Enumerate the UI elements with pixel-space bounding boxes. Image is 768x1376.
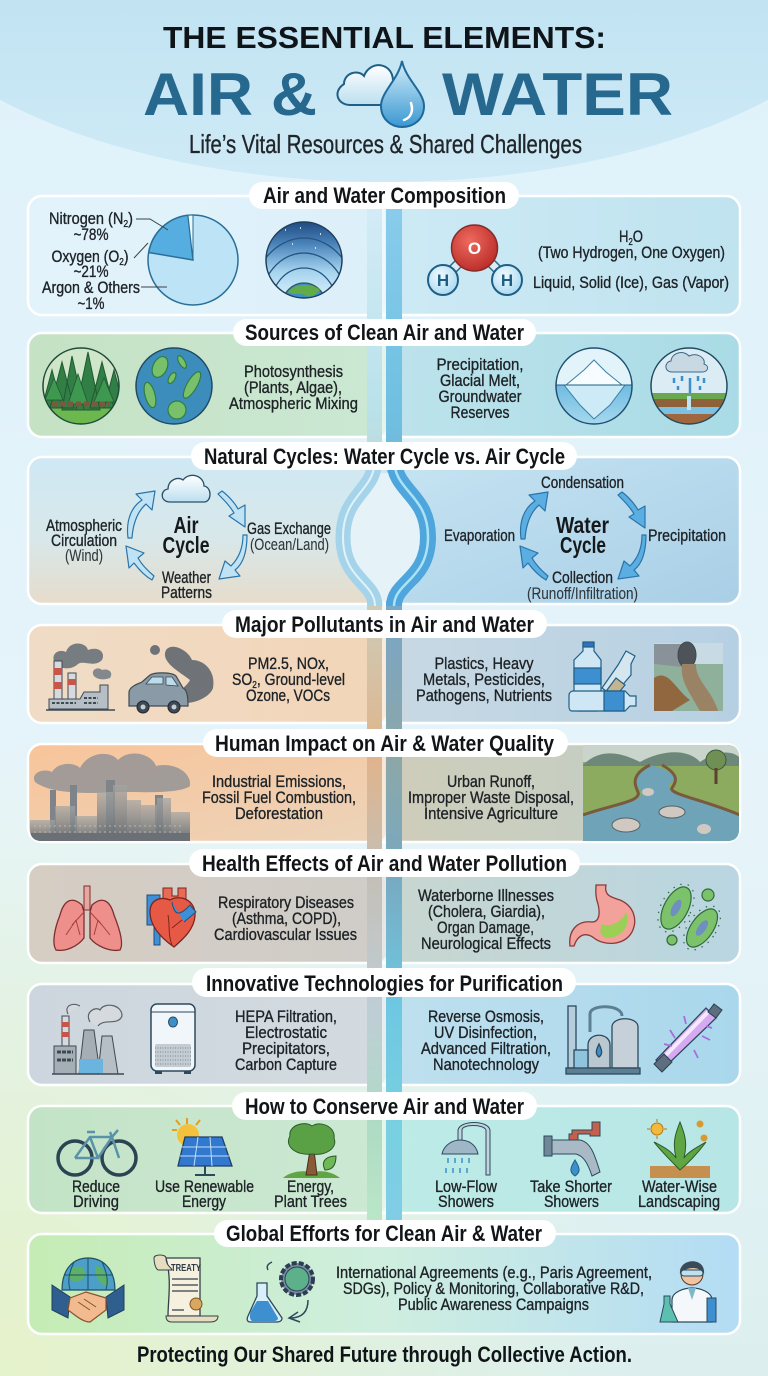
composition labels: )	[128, 209, 133, 228]
conserve air labels: Driving	[73, 1192, 119, 1211]
title word: water: WATER	[442, 61, 673, 128]
health effects of water text	[418, 886, 554, 953]
health effects of air text: (Asthma, COPD),	[232, 909, 341, 928]
heading: technologies: Innovative Technologies for Purification	[206, 971, 563, 996]
sources of clean water text: Glacial Melt,	[440, 371, 520, 390]
heading: conserve: How to Conserve Air and Water	[245, 1094, 524, 1119]
icon: flask and gear	[247, 1262, 313, 1322]
diagram: water cycle: Cycle	[560, 532, 606, 558]
conserve air labels: Energy,	[287, 1177, 334, 1196]
human impact on air text: Fossil Fuel Combustion,	[202, 788, 356, 807]
panel: human impact	[28, 744, 740, 842]
air pollutants text: SO	[232, 670, 257, 689]
heading: composition: Air and Water Composition	[263, 183, 506, 208]
water purification technologies text	[421, 1007, 551, 1074]
air purification technologies text: Precipitators,	[242, 1039, 330, 1058]
air pollutants text: , Ground-level	[257, 670, 345, 689]
icon: scientist	[660, 1261, 716, 1322]
sources of clean water text: Precipitation,	[436, 355, 524, 374]
icon: cloud and water drop	[337, 61, 424, 127]
composition labels: 2	[119, 257, 124, 268]
icon: iceberg	[556, 348, 632, 425]
panel: cycles	[28, 457, 740, 604]
icon: heart	[147, 888, 196, 947]
human impact on water text: Improper Waste Disposal,	[408, 788, 574, 807]
human impact on air text: Deforestation	[235, 804, 323, 823]
icon: water treatment plant	[566, 1006, 640, 1074]
icon: bicycle	[58, 1130, 136, 1175]
icon: air purifier	[151, 1004, 195, 1074]
title line 1: THE ESSENTIAL ELEMENTS:	[163, 20, 606, 55]
conserve air labels: Plant Trees	[274, 1192, 347, 1211]
diagram: air cycle: Circulation	[51, 531, 117, 550]
icon: globe and handshake	[52, 1258, 124, 1322]
human impact on water text	[408, 772, 574, 823]
composition labels: 2	[123, 219, 129, 230]
water pollutants text: Plastics, Heavy	[434, 654, 534, 673]
water pollutants text: Metals, Pesticides,	[423, 670, 545, 689]
conserve water labels: Showers	[438, 1192, 494, 1211]
water purification technologies text: Nanotechnology	[433, 1055, 539, 1074]
air pollutants text: PM2.5, NOx,	[248, 654, 329, 673]
composition labels: Nitrogen (N	[49, 209, 136, 228]
icon: smoggy skyline	[30, 753, 190, 842]
icon: treaty scroll	[154, 1255, 218, 1322]
water purification technologies text: Advanced Filtration,	[421, 1039, 551, 1058]
composition labels: Argon & Others	[42, 278, 140, 297]
health effects of water text: Waterborne Illnesses	[418, 886, 554, 905]
health effects of air text: Cardiovascular Issues	[214, 925, 357, 944]
conserve water labels: Water-Wise	[642, 1177, 717, 1196]
water composition text: H	[619, 227, 631, 246]
global efforts text	[336, 1263, 652, 1314]
water pollutants text: Pathogens, Nutrients	[416, 686, 552, 705]
heading: cycles: Natural Cycles: Water Cycle vs. Air Cycle	[204, 444, 565, 469]
conserve water labels: Low-Flow	[435, 1177, 498, 1196]
human impact on water text: Intensive Agriculture	[424, 804, 558, 823]
footer tagline: Protecting Our Shared Future through Collective Action.	[137, 1342, 632, 1367]
diagram: water cycle	[444, 473, 726, 603]
water composition text	[533, 227, 729, 292]
icon: water molecule: O	[468, 239, 481, 258]
icon: stomach	[570, 885, 635, 946]
heading: human impact: Human Impact on Air & Water Quality	[215, 731, 554, 756]
icon: tree	[283, 1124, 340, 1178]
global efforts text: SDGs), Policy & Monitoring, Collaborative R&D,	[343, 1279, 644, 1298]
sources of clean water text: Reserves	[450, 403, 510, 422]
diagram: water cycle: Precipitation	[648, 526, 726, 545]
air purification technologies text: Carbon Capture	[235, 1055, 337, 1074]
icon: water molecule	[428, 225, 522, 295]
air pollutants text: 2	[252, 680, 257, 691]
diagram: water cycle: Water	[556, 512, 609, 538]
heading: health: Health Effects of Air and Water Pollution	[202, 851, 567, 876]
conserve water labels: Take Shorter	[530, 1177, 612, 1196]
air purification technologies text: HEPA Filtration,	[235, 1007, 337, 1026]
icon: uv tube	[654, 1004, 722, 1072]
composition labels: Oxygen (O	[52, 247, 134, 266]
sources of clean air text	[229, 362, 358, 413]
arrows	[126, 491, 247, 580]
composition labels: )	[124, 247, 129, 266]
panel: technologies	[28, 984, 740, 1085]
icon: sewage pipe	[654, 642, 723, 711]
conserve air labels: Reduce	[72, 1177, 120, 1196]
conserve water labels: Showers	[544, 1192, 599, 1211]
health effects of air text: Respiratory Diseases	[218, 893, 354, 912]
human impact on water text: Urban Runoff,	[447, 772, 535, 791]
water composition text: (Two Hydrogen, One Oxygen)	[538, 243, 725, 262]
icon: shower	[442, 1122, 490, 1175]
diagram: water cycle: (Runoff/Infiltration)	[527, 584, 638, 603]
composition labels	[42, 209, 140, 313]
central air and water streams	[340, 209, 432, 1234]
diagram: air cycle: Gas Exchange	[247, 519, 331, 538]
air pollutants text	[232, 654, 345, 705]
icon: plastic bottles	[569, 642, 636, 711]
diagram: air cycle: Air	[174, 512, 198, 538]
panel: composition	[28, 196, 740, 315]
icon: microorganisms	[136, 348, 212, 424]
conserve air labels: Use Renewable	[155, 1177, 254, 1196]
title block	[143, 20, 673, 159]
diagram: air cycle: (Wind)	[65, 546, 103, 565]
icon: treaty scroll: TREATY	[171, 1263, 201, 1274]
panel: health	[28, 864, 740, 963]
diagram: water cycle: Condensation	[541, 473, 624, 492]
icon: atmosphere layers	[265, 221, 343, 299]
conserve air labels: Energy	[182, 1192, 226, 1211]
icon: clean factory	[52, 1004, 124, 1074]
health effects of water text: (Cholera, Giardia),	[428, 902, 545, 921]
icon: solar panel	[172, 1118, 232, 1175]
title word: air: AIR &	[143, 61, 317, 128]
water composition text: 2	[628, 237, 633, 248]
sources of clean water text: Groundwater	[438, 387, 522, 406]
icon: bacteria	[651, 878, 728, 957]
icon: water-wise plant	[647, 1119, 710, 1178]
diagram: water cycle: Evaporation	[444, 526, 515, 545]
icon: cloud	[162, 475, 210, 502]
water composition text: O	[633, 227, 643, 246]
panel: conserve	[28, 1106, 740, 1213]
sources of clean air text: Atmospheric Mixing	[229, 394, 358, 413]
header arc	[0, 0, 768, 182]
diagram: water cycle: Collection	[552, 568, 613, 587]
water pollutants text	[416, 654, 552, 705]
conserve water labels: Landscaping	[638, 1192, 720, 1211]
composition labels: ~1%	[78, 294, 104, 313]
icon: polluting car	[129, 645, 213, 713]
icon: water molecule: H	[501, 271, 513, 290]
diagram: air cycle: Weather	[162, 568, 211, 587]
sources of clean air text: Photosynthesis	[244, 362, 343, 381]
air pollutants text: Ozone, VOCs	[246, 686, 330, 705]
conserve water labels	[435, 1177, 720, 1211]
icon: forest	[42, 348, 124, 426]
diagram: air cycle: (Ocean/Land)	[250, 535, 329, 554]
air purification technologies text: Electrostatic	[245, 1023, 327, 1042]
heading: global efforts: Global Efforts for Clean Air & Water	[226, 1221, 542, 1246]
diagram: air cycle: Atmospheric	[46, 516, 122, 535]
human impact on air text: Industrial Emissions,	[212, 772, 346, 791]
panel: sources	[28, 333, 740, 437]
water purification technologies text: UV Disinfection,	[434, 1023, 537, 1042]
diagram: air cycle	[46, 475, 331, 602]
icon: lungs	[54, 886, 122, 950]
icon: factory with smoke	[46, 644, 115, 710]
icon: groundwater	[650, 348, 728, 428]
heading: pollutants: Major Pollutants in Air and Water	[235, 612, 534, 637]
heading: sources: Sources of Clean Air and Water	[245, 320, 524, 345]
global efforts text: International Agreements (e.g., Paris Agreement,	[336, 1263, 652, 1282]
icon: faucet	[544, 1122, 600, 1176]
composition labels: ~21%	[74, 262, 108, 281]
water purification technologies text: Reverse Osmosis,	[428, 1007, 544, 1026]
human impact on air text	[202, 772, 356, 823]
diagram: air cycle: Patterns	[161, 583, 212, 602]
icon: water molecule: H	[437, 271, 449, 290]
illustration: polluted river	[583, 744, 740, 842]
water composition text: Liquid, Solid (Ice), Gas (Vapor)	[533, 273, 729, 292]
panel: pollutants	[28, 625, 740, 723]
sources of clean water text	[436, 355, 524, 422]
health effects of water text: Neurological Effects	[421, 934, 551, 953]
pie chart: air composition	[134, 215, 238, 305]
health effects of air text	[214, 893, 357, 944]
global efforts text: Public Awareness Campaigns	[398, 1295, 589, 1314]
panel: global efforts	[28, 1234, 740, 1334]
composition labels: ~78%	[74, 225, 108, 244]
subtitle: Life’s Vital Resources & Shared Challenges	[189, 129, 582, 159]
air purification technologies text	[235, 1007, 337, 1074]
diagram: air cycle: Cycle	[162, 532, 210, 558]
health effects of water text: Organ Damage,	[437, 918, 534, 937]
sources of clean air text: (Plants, Algae),	[244, 378, 342, 397]
arrows	[520, 492, 646, 580]
conserve air labels	[72, 1177, 347, 1211]
